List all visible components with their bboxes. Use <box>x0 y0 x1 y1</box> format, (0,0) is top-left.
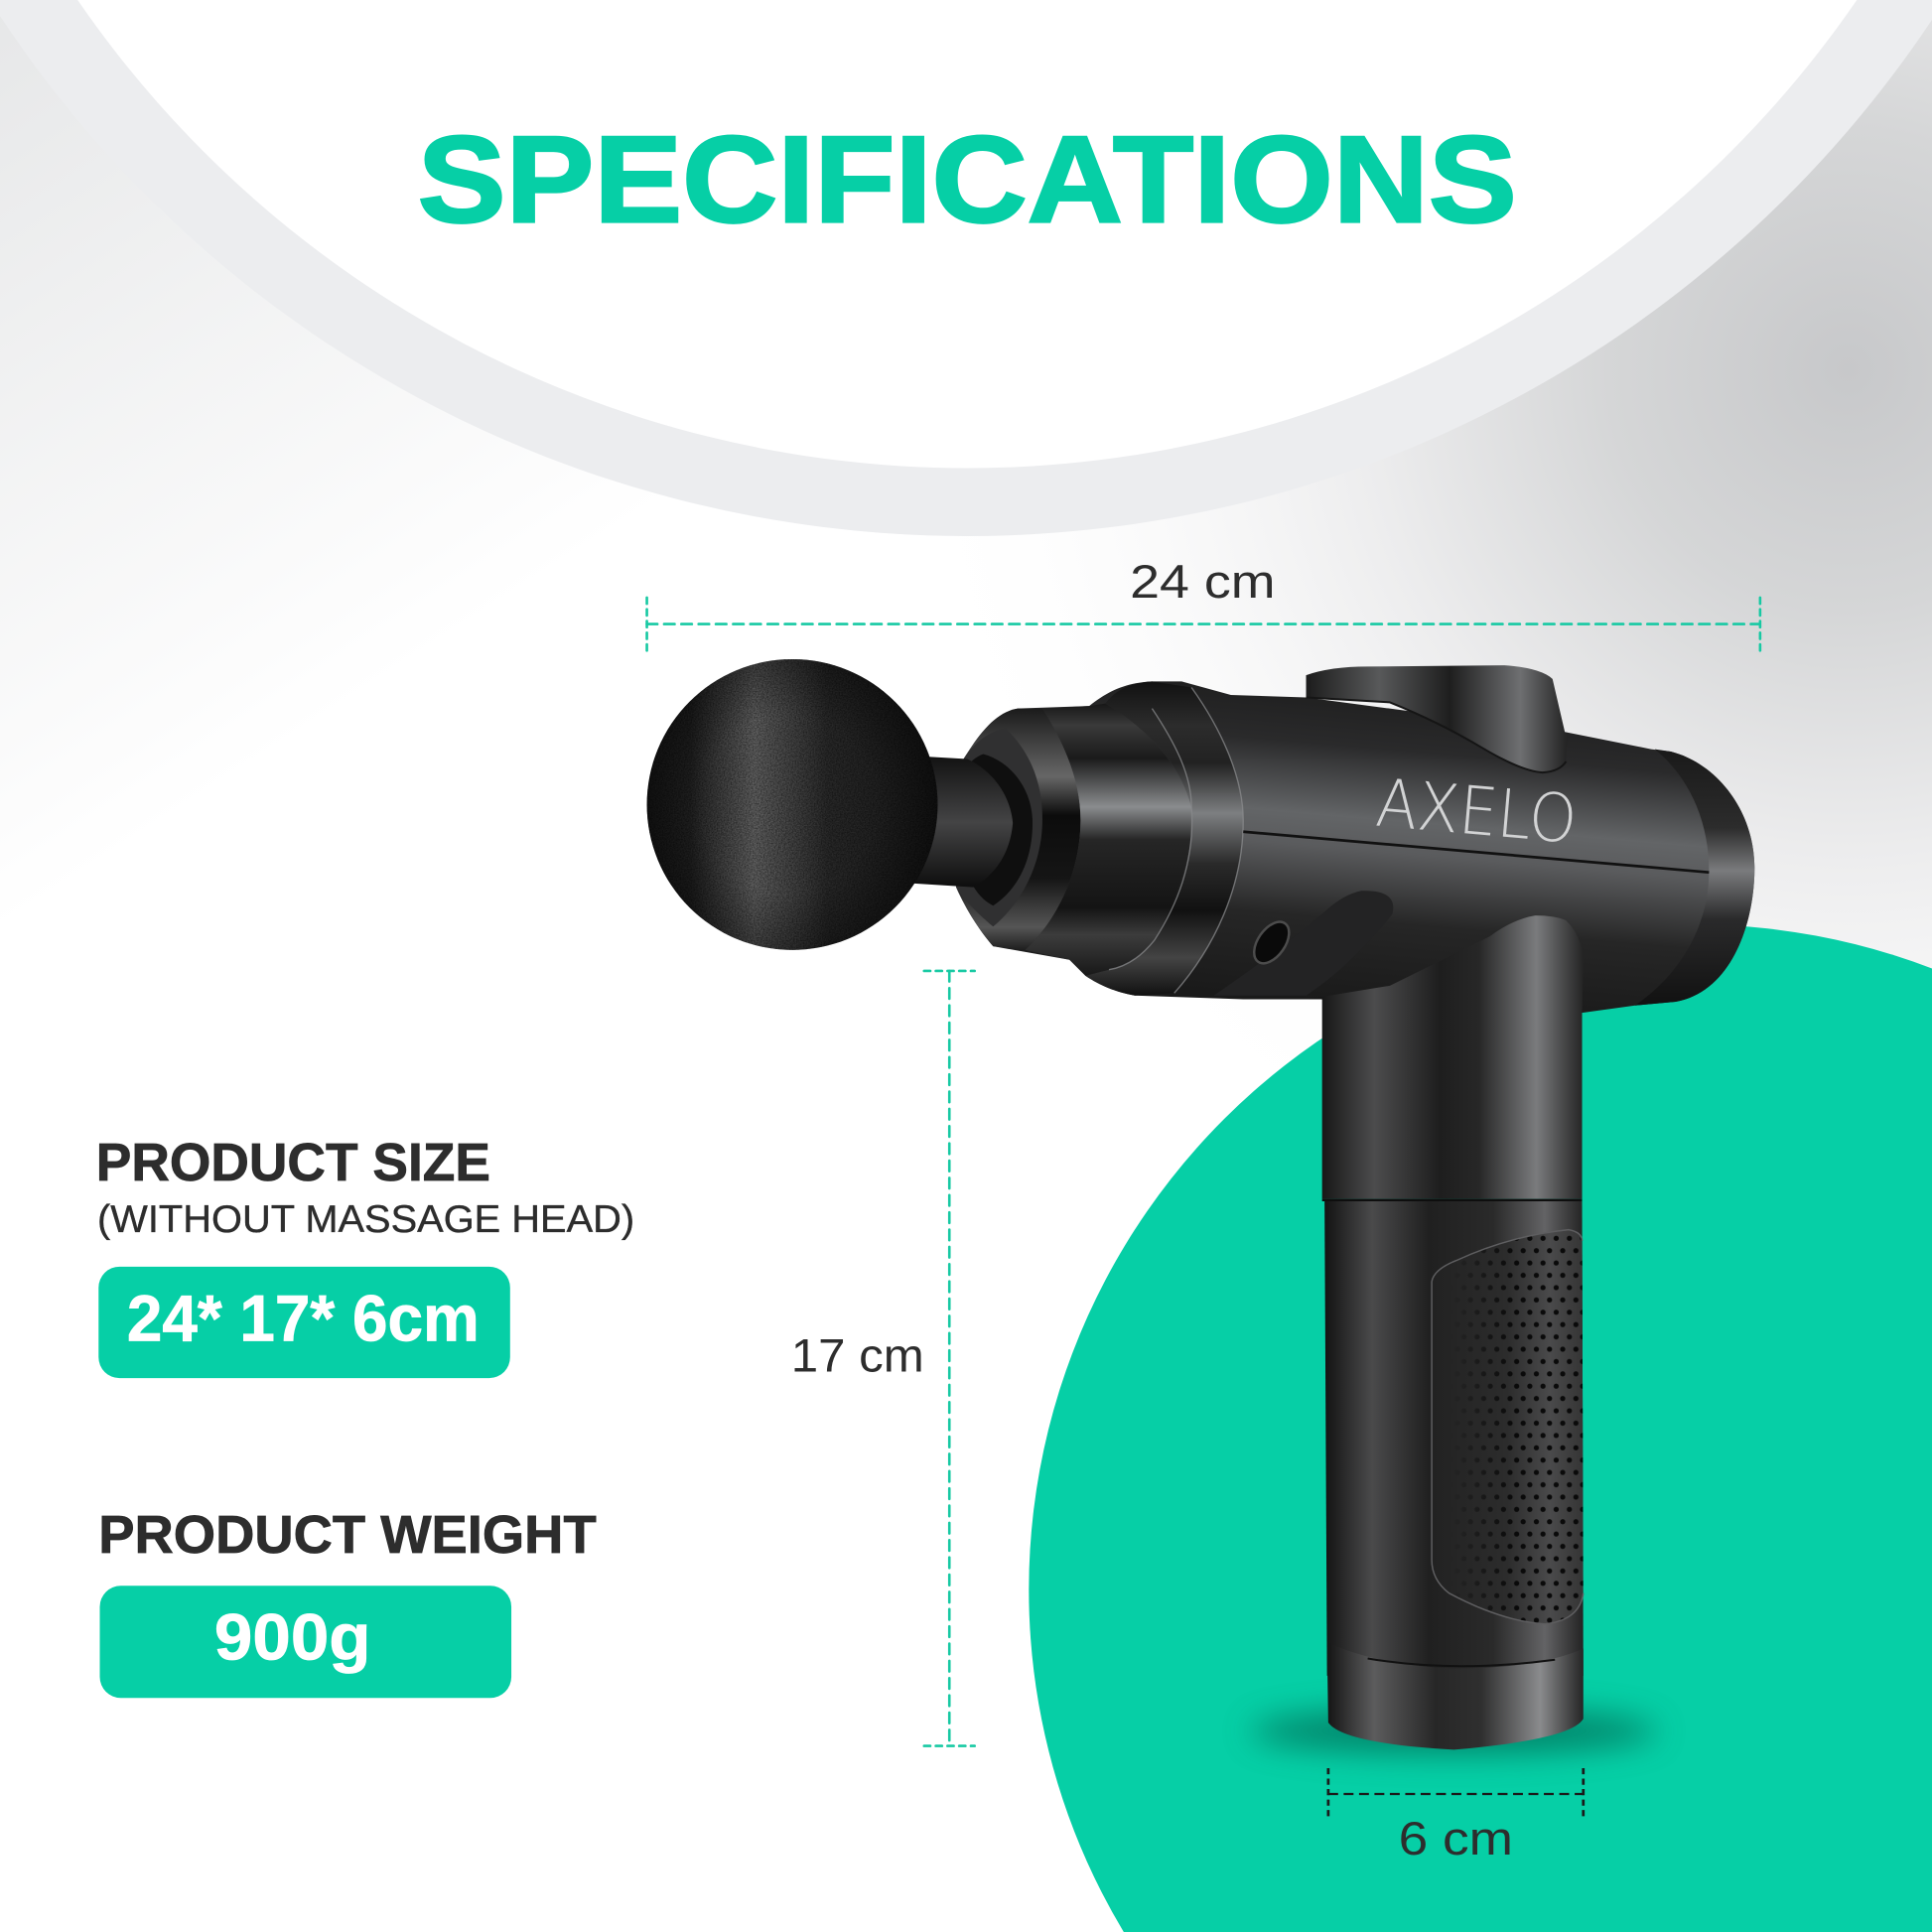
green circle <box>1029 924 1932 1932</box>
massage ball head <box>647 659 937 950</box>
face recess <box>961 755 1033 905</box>
right end cap <box>1635 750 1754 1006</box>
heading: product weight: PRODUCT WEIGHT <box>98 1506 597 1565</box>
collar ring <box>1085 681 1243 996</box>
bottom cap <box>1327 1642 1584 1749</box>
heading: product size: PRODUCT SIZE <box>96 1134 490 1192</box>
knob fold highlight <box>1307 697 1566 772</box>
badge: product size value: 24* 17* 6cm <box>127 1281 480 1354</box>
dimension: 6 cm: 6 cm <box>1399 1812 1513 1864</box>
collar seams <box>1109 688 1243 993</box>
badge: product weight value: 900g <box>214 1600 371 1674</box>
upper handle <box>1307 915 1584 1199</box>
dimension: 24 cm: 24 cm <box>1130 555 1276 608</box>
badge: product weight value <box>100 1586 511 1698</box>
brand logo: AXELO <box>1373 764 1580 859</box>
neck shaft <box>914 757 1013 888</box>
grip outline <box>1432 1230 1584 1624</box>
floor shadow <box>1251 1709 1657 1753</box>
inner white arc <box>77 0 1857 469</box>
top knob <box>1307 665 1568 772</box>
side hole <box>1247 915 1296 970</box>
bottom cap seam <box>1368 1658 1555 1666</box>
product photo: massage gun <box>647 659 1754 1753</box>
textured grip <box>1469 1232 1584 1623</box>
title: SPECIFICATIONS <box>418 111 1517 248</box>
front barrel section <box>1026 704 1192 976</box>
lower handle <box>1324 1201 1584 1676</box>
outer grey arc <box>0 0 1932 536</box>
front cone ring <box>954 709 1080 950</box>
handle seam <box>1322 1199 1583 1201</box>
sub-heading: without massage head: (WITHOUT MASSAGE HEAD) <box>97 1198 634 1241</box>
dimension: 17 cm: 17 cm <box>791 1328 924 1381</box>
badge: product size value <box>98 1267 510 1378</box>
body shell <box>954 681 1754 1013</box>
body seam line <box>1243 832 1709 873</box>
face inner ring <box>954 728 1042 926</box>
side slot <box>1213 891 1393 996</box>
